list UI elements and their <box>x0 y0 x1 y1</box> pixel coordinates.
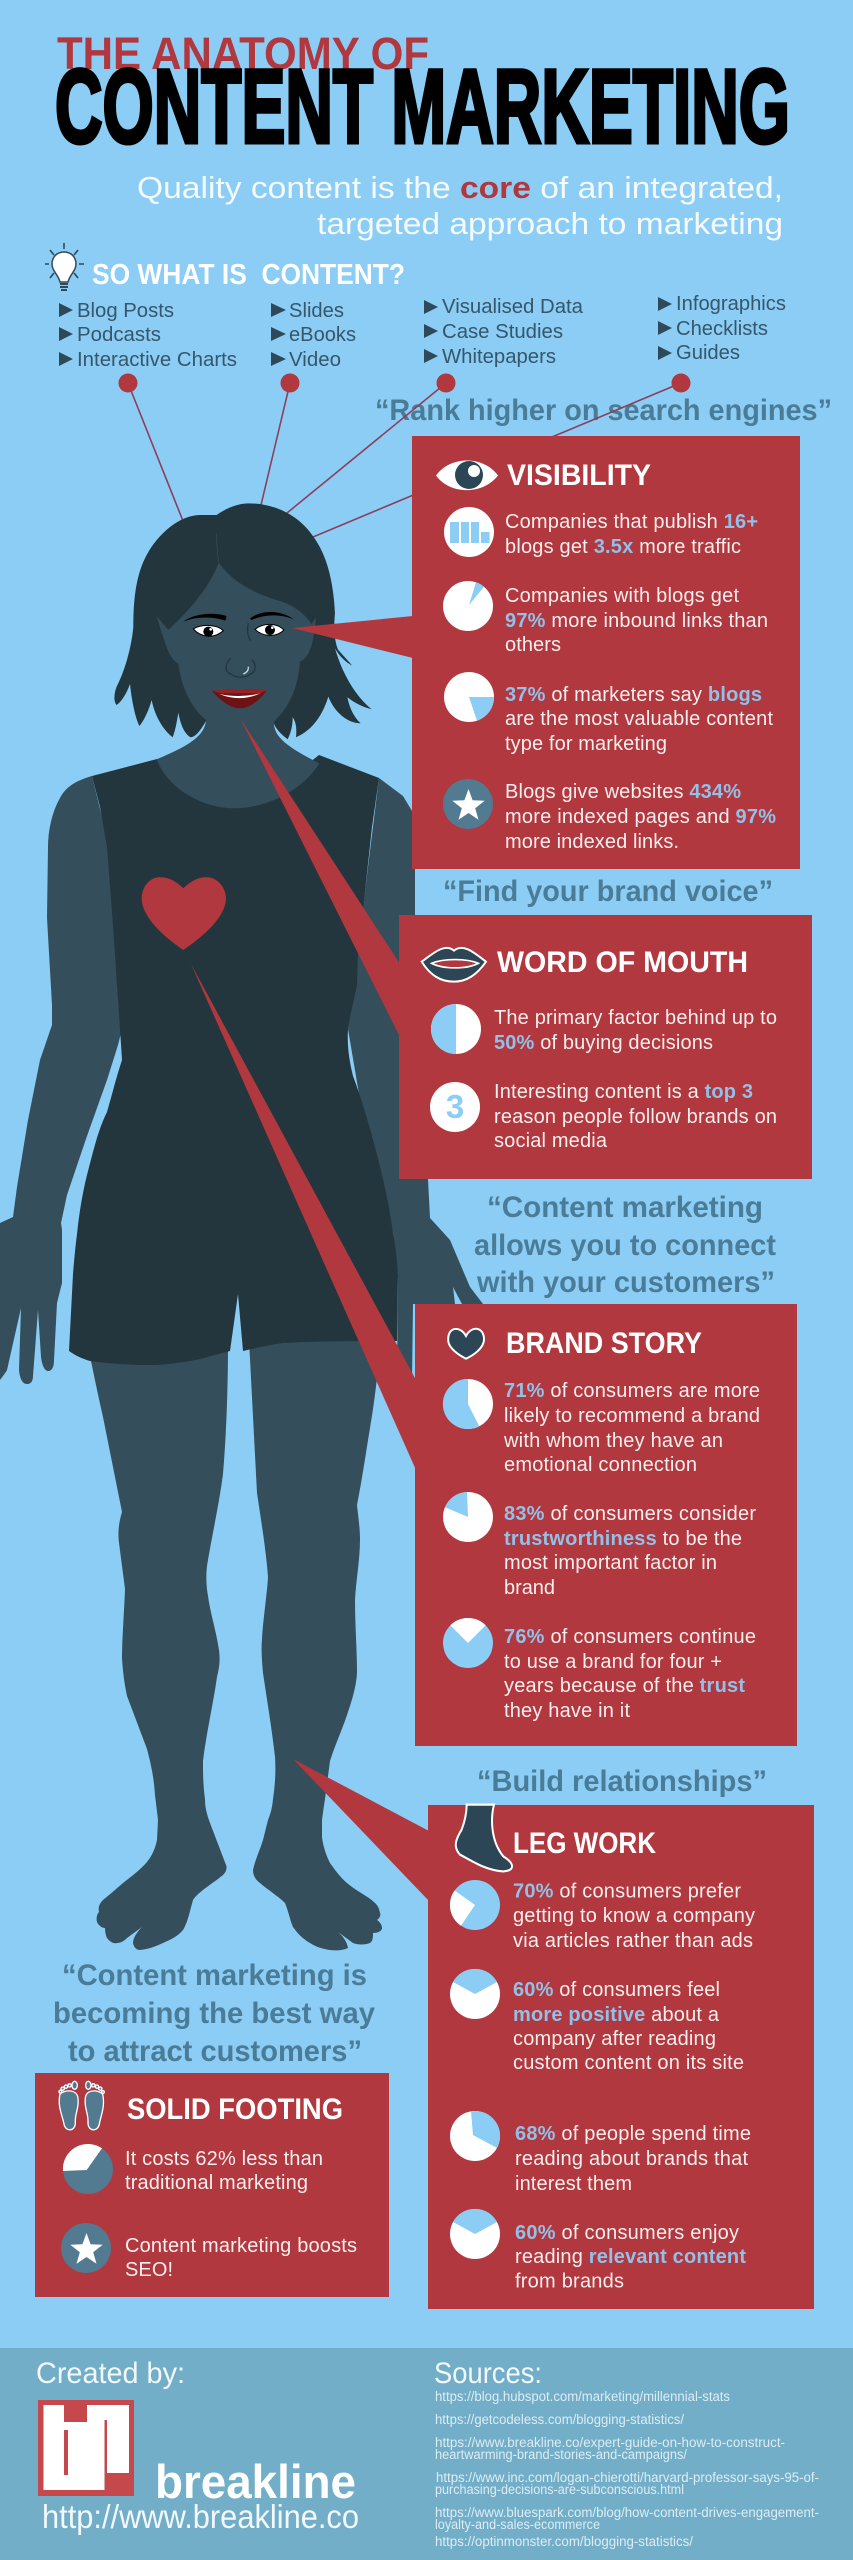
stat: 60% relevant content: reading relevant content <box>515 2246 746 2268</box>
logo: breakline wordmark: breakline <box>155 2455 356 2508</box>
subtitle: targeted approach to marketing <box>317 206 783 241</box>
stat: 76% trust: 76% of consumers continue <box>504 1626 756 1648</box>
content list column 3 <box>424 296 584 368</box>
stat: 60% more positive <box>513 1979 744 2074</box>
stat: 68% reading about brands: 68% of people spend time <box>515 2123 751 2145</box>
quote: connect with customers: “Content marketing <box>487 1191 763 1224</box>
sources list: https://getcodeless.com/blogging-statistics/ <box>435 2412 684 2427</box>
eyebrows <box>183 612 294 622</box>
sources list: https://www.breakline.co/expert-guide-on-how-to-construct- <box>435 2435 785 2450</box>
content list column 2: Slides <box>289 300 344 322</box>
quote: build relationships: “Build relationships” <box>477 1765 767 1798</box>
heading: solid footing: SOLID FOOTING <box>127 2093 343 2126</box>
sources list: purchasing-decisions-are-subconscious.html <box>435 2482 684 2497</box>
content list column 2 <box>271 300 356 371</box>
content list column 1: Blog Posts <box>77 300 174 322</box>
pie: 62 percent <box>63 2144 113 2194</box>
quote: attract customers: “Content marketing is <box>62 1959 367 1992</box>
pie: 68 percent <box>450 2111 500 2161</box>
stat: 60% relevant content: from brands <box>515 2270 624 2292</box>
sources list <box>435 2389 819 2549</box>
stat: 434% indexed pages: Blogs give websites 434% <box>505 781 741 803</box>
lips <box>212 689 267 708</box>
stat: 83% trustworthiness: brand <box>504 1577 555 1599</box>
sources list: loyalty-and-sales-ecommerce <box>435 2517 600 2532</box>
stat: 70% articles: via articles rather than ads <box>513 1930 753 1952</box>
stat: 62% less: It costs 62% less than <box>125 2148 323 2170</box>
panel: word of mouth <box>399 915 812 1179</box>
content list column 1: Podcasts <box>77 324 161 346</box>
stat: 60% relevant content: 60% of consumers enjoy <box>515 2222 739 2244</box>
sources list: heartwarming-brand-stories-and-campaigns/ <box>435 2447 687 2462</box>
icon: star <box>443 779 493 829</box>
subtitle: Quality content is the core of an integrated, <box>137 170 783 205</box>
quote: attract customers <box>53 1959 375 2068</box>
stat: 60% more positive: custom content on its site <box>513 2052 744 2074</box>
nose <box>226 623 255 677</box>
stat: 83% trustworthiness: trustworthiness to be the <box>504 1528 742 1550</box>
sources list: https://blog.hubspot.com/marketing/millennial-stats <box>435 2389 730 2404</box>
pie: 83 percent <box>443 1492 493 1542</box>
icon: number 3: 3 <box>446 1088 464 1125</box>
head <box>114 503 372 808</box>
left arm and hand <box>0 776 122 1384</box>
figure: woman <box>0 503 483 1950</box>
stat: top 3 reason <box>494 1081 777 1152</box>
created by heading: Created by: <box>36 2357 185 2390</box>
pie: 70 percent <box>450 1880 500 1930</box>
content list column 1 <box>59 300 237 371</box>
icon: heart <box>448 1329 484 1359</box>
stat: 83% trustworthiness: 83% of consumers consider <box>504 1503 756 1525</box>
stat: 71% recommend: with whom they have an <box>503 1430 723 1452</box>
logo: breakline mark <box>38 2400 134 2496</box>
right leg and foot <box>249 1340 382 1950</box>
callout: eye to visibility <box>292 616 413 658</box>
stat: 50% buying decisions <box>494 1007 777 1054</box>
panel: solid footing <box>35 2073 389 2297</box>
heading: brand story: BRAND STORY <box>506 1327 702 1360</box>
sources list: https://www.bluespark.com/blog/how-content-drives-engagement- <box>435 2505 819 2520</box>
eyes <box>193 625 223 636</box>
icon: light bulb <box>45 243 84 290</box>
stat: 37% marketers: type for marketing <box>505 733 667 755</box>
pie: 60 percent second <box>450 2209 500 2259</box>
stat: top 3 reason: Interesting content is a top 3 <box>494 1081 753 1103</box>
stat: 76% trust: they have in it <box>504 1700 630 1722</box>
stat: 97% inbound links: Companies with blogs get <box>505 585 739 607</box>
content list column 4: Checklists <box>676 318 768 340</box>
stat: 60% more positive: more positive about a <box>513 2004 720 2026</box>
content list column 2: eBooks <box>289 324 356 346</box>
heading: word of mouth: WORD OF MOUTH <box>497 946 748 979</box>
hair parting <box>217 533 219 563</box>
stat: 70% articles: getting to know a company <box>513 1905 755 1927</box>
pie: 37 percent <box>444 672 494 722</box>
right arm <box>348 778 483 1378</box>
dress <box>69 755 398 1365</box>
icon: star <box>61 2223 111 2273</box>
heading: visibility: VISIBILITY <box>507 459 651 492</box>
stat: 16+ blogs <box>505 511 758 558</box>
pie: 71 percent <box>443 1379 493 1429</box>
stat: 434% indexed pages: more indexed links. <box>505 831 679 853</box>
stat: boosts SEO: Content marketing boosts <box>125 2235 357 2257</box>
icon: feet <box>59 2081 104 2130</box>
stat: top 3 reason: reason people follow brands on <box>494 1106 777 1128</box>
quote: connect with customers: with your customers” <box>476 1266 775 1299</box>
callout: mouth to word of mouth <box>240 718 400 1037</box>
stat: 434% indexed pages: more indexed pages and 97% <box>505 806 776 828</box>
title: the anatomy of: THE ANATOMY OF <box>57 28 429 79</box>
quote: connect with customers <box>474 1191 776 1299</box>
connector lines and dots to the head <box>118 374 690 537</box>
stat: 50% buying decisions: 50% of buying decisions <box>494 1032 713 1054</box>
footer <box>0 2348 853 2560</box>
stat: boosts SEO: SEO! <box>125 2259 173 2281</box>
stat: 68% reading about brands <box>515 2123 751 2195</box>
stat: top 3 reason: social media <box>494 1130 608 1152</box>
icon: eye <box>436 460 498 490</box>
panel: visibility <box>412 436 800 869</box>
stat: 37% marketers: are the most valuable content <box>505 708 773 730</box>
stat: 83% trustworthiness: most important factor in <box>504 1552 717 1574</box>
stat: 70% articles: 70% of consumers prefer <box>513 1880 741 1902</box>
stat: 68% reading about brands: interest them <box>515 2173 632 2195</box>
content list column 4: Infographics <box>676 293 786 315</box>
hair <box>114 503 372 739</box>
stat: 76% trust <box>504 1626 756 1722</box>
stat: 71% recommend: likely to recommend a brand <box>504 1405 760 1427</box>
sources heading: Sources: <box>434 2357 542 2390</box>
stat: 37% marketers: 37% of marketers say blogs <box>505 684 762 706</box>
stat: 71% recommend <box>503 1380 760 1476</box>
left leg and foot <box>91 1345 228 1950</box>
quote: attract customers: to attract customers” <box>68 2035 362 2068</box>
panel: brand story <box>415 1304 797 1746</box>
heading: so what is content: SO WHAT IS CONTENT? <box>92 259 405 291</box>
sources list: https://optinmonster.com/blogging-statistics/ <box>435 2534 693 2549</box>
content list column 2: Video <box>289 349 341 371</box>
stat: 16+ blogs: blogs get 3.5x more traffic <box>505 536 741 558</box>
sources list: https://www.inc.com/logan-chierotti/harvard-professor-says-95-of- <box>436 2470 819 2485</box>
stat: 83% trustworthiness <box>504 1503 756 1599</box>
subtitle <box>137 170 783 241</box>
content list column 3: Case Studies <box>442 321 563 343</box>
icon: lips <box>422 948 486 982</box>
stat: 60% more positive: 60% of consumers feel <box>513 1979 720 2001</box>
stat: 68% reading about brands: reading about brands that <box>515 2148 748 2170</box>
heading: leg work: LEG WORK <box>513 1827 656 1860</box>
stat: 60% more positive: company after reading <box>513 2028 716 2050</box>
quote: connect with customers: allows you to connect <box>474 1229 776 1262</box>
stat: 50% buying decisions: The primary factor behind up to <box>494 1007 777 1029</box>
quote: find your brand voice: “Find your brand voice” <box>443 875 773 908</box>
stat: 97% inbound links: others <box>505 634 561 656</box>
callout: heart to brand story <box>191 964 416 1470</box>
pie: 50 percent <box>431 1004 481 1054</box>
stat: 62% less <box>125 2148 323 2194</box>
pie: 97 percent <box>443 581 493 631</box>
stat: 37% marketers <box>505 684 773 755</box>
stat: boosts SEO <box>125 2235 357 2281</box>
panel: leg work <box>428 1805 814 2309</box>
stat: 60% relevant content <box>515 2222 746 2292</box>
stat: 76% trust: to use a brand for four + <box>504 1651 722 1673</box>
website url: http://www.breakline.co <box>42 2498 359 2535</box>
content list column 3: Visualised Data <box>442 296 584 318</box>
stat: 71% recommend: emotional connection <box>504 1454 697 1476</box>
icon: bars <box>444 507 494 557</box>
stat: 97% inbound links <box>505 585 768 656</box>
heart on chest <box>142 877 226 950</box>
quote: attract customers: becoming the best way <box>53 1997 375 2030</box>
pie: 60 percent <box>450 1969 500 2019</box>
pie: 76 percent <box>443 1618 493 1668</box>
content list column 1: Interactive Charts <box>77 349 237 371</box>
content list column 4: Guides <box>676 342 740 364</box>
stat: 16+ blogs: Companies that publish 16+ <box>505 511 758 533</box>
icon: number 3 <box>430 1082 480 1132</box>
callout: leg to leg work <box>293 1759 429 1901</box>
face and neck <box>157 563 319 808</box>
icon: foot <box>456 1805 512 1871</box>
quote: rank higher: “Rank higher on search engines” <box>375 394 832 427</box>
stat: 62% less: traditional marketing <box>125 2172 308 2194</box>
stat: 71% recommend: 71% of consumers are more <box>504 1380 760 1402</box>
stat: 434% indexed pages <box>505 781 776 853</box>
stat: 97% inbound links: 97% more inbound links than <box>505 610 768 632</box>
stat: 70% articles <box>513 1880 755 1952</box>
content list column 3: Whitepapers <box>442 346 556 368</box>
content list column 4 <box>658 293 786 364</box>
stat: 76% trust: years because of the trust <box>504 1675 745 1697</box>
